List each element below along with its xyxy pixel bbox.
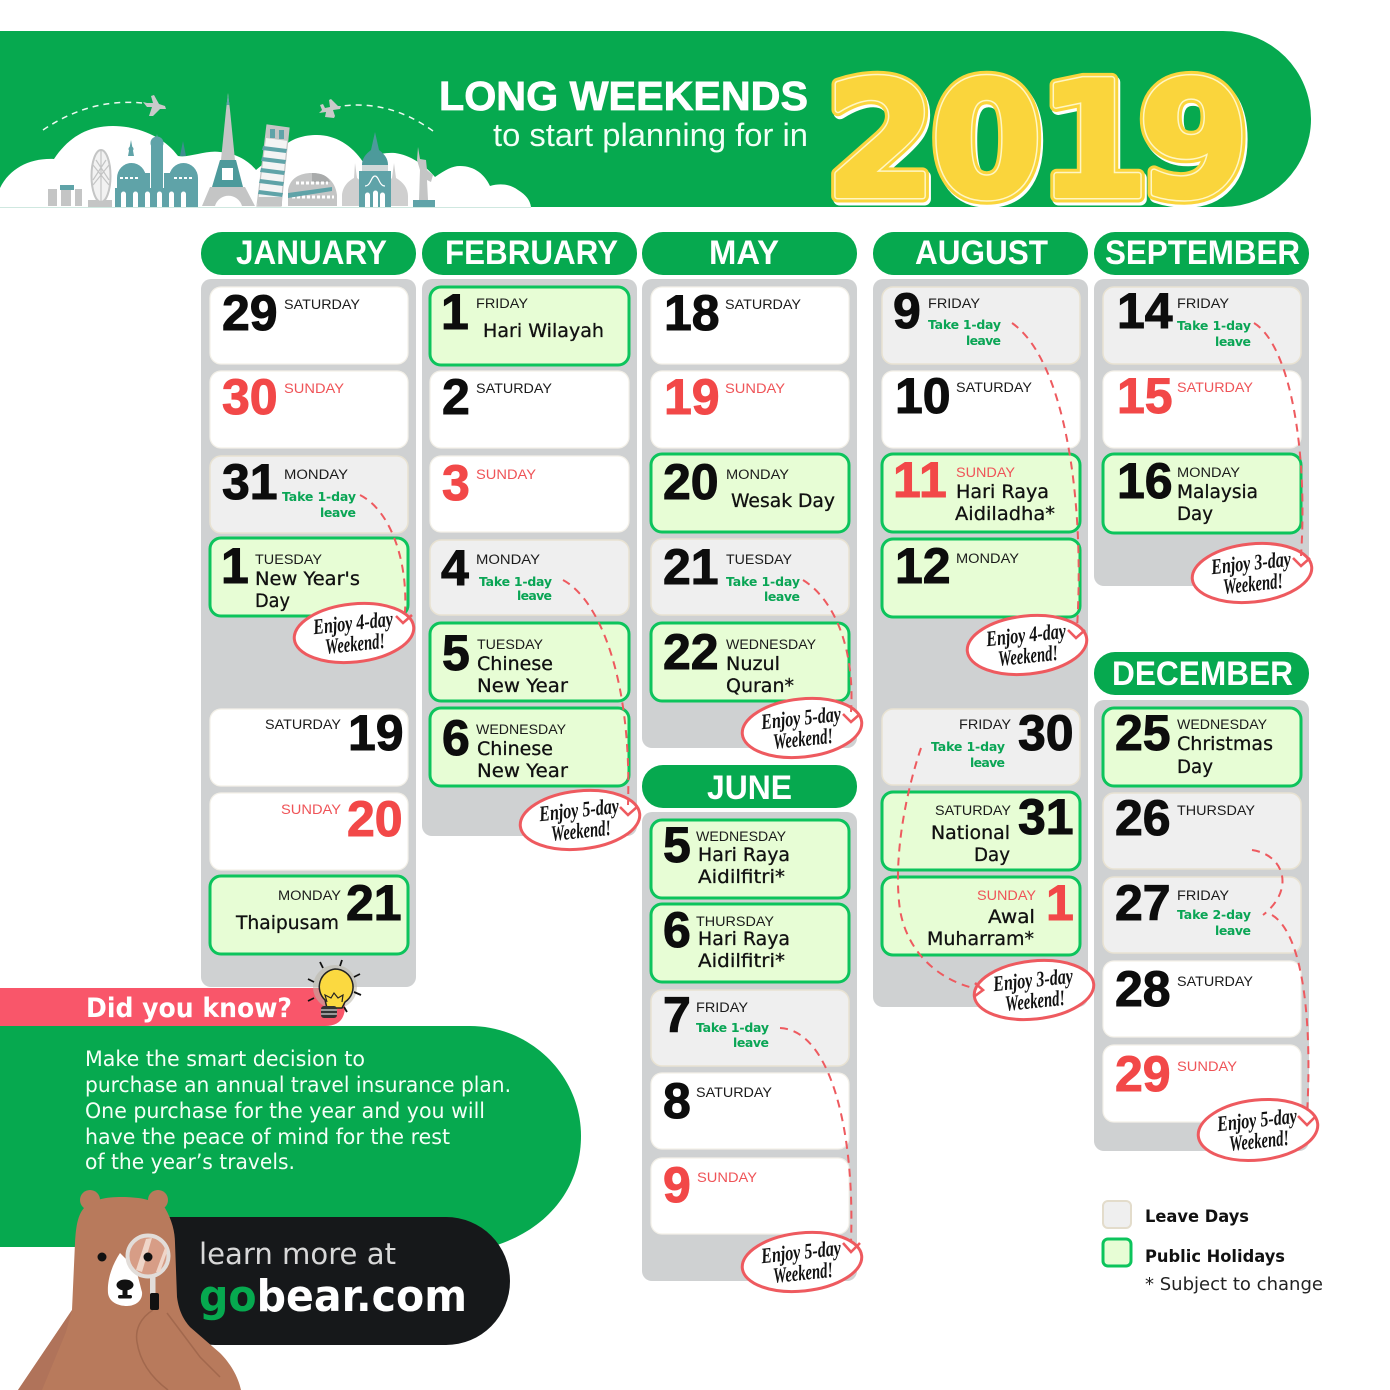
card: 16 malaysia day [1103,453,1301,533]
card: 7 friday: FRIDAY [696,1000,748,1015]
card: 7 friday: Take 1-day [696,1020,769,1035]
card: 30 sunday: SUNDAY [284,381,344,396]
arrow: june [780,1028,860,1252]
card: 3 sunday: SUNDAY [476,467,536,482]
callout: enjoy 5-day weekend february: Weekend! [550,815,612,846]
legend: public holidays [1103,1239,1285,1267]
card: 1 awal muharram: 1 [1046,875,1074,931]
card: 11 hari raya aidiladha [882,452,1080,532]
card: 20 sunday: SUNDAY [281,802,341,817]
card: 1 awal muharram: SUNDAY [977,888,1036,903]
panel: august [873,232,1088,1007]
card: 22 nuzul quran: WEDNESDAY [726,637,816,652]
card: 16 malaysia day: 16 [1117,453,1173,509]
card: 19 sunday: 19 [664,369,720,425]
card: 11 hari raya aidiladha: Hari Raya [956,481,1049,503]
card: 19 saturday: 19 [348,705,404,761]
card: 9 friday: Take 1-day [928,317,1001,332]
callout: enjoy 5-day weekend may [739,693,865,763]
callout: enjoy 4-day weekend january: Weekend! [324,628,386,659]
panel: september [1094,232,1309,586]
card: 27 friday: 27 [1115,875,1171,931]
card: 25 christmas day [1103,705,1301,786]
card: 9 sunday: 9 [663,1157,691,1213]
card: 9 friday [882,283,1080,364]
panel: may [642,232,857,748]
card: 25 christmas day: WEDNESDAY [1177,717,1267,732]
card: 6 chinese new year: Chinese [477,738,553,760]
card: 1 awal muharram: Muharram* [927,928,1034,950]
card: 14 friday: Take 1-day [1177,318,1251,333]
card: 14 friday: FRIDAY [1177,296,1229,311]
card: 12 monday: MONDAY [956,551,1019,566]
card: 29 sunday: 29 [1115,1046,1171,1102]
arrow: february [563,580,637,815]
header banner [0,31,1311,237]
card: 6 chinese new year: 6 [442,710,470,766]
card: 22 nuzul quran: Quran* [726,675,794,697]
body text: purchase an annual travel insurance plan. [85,1073,511,1097]
card: 14 friday: 14 [1117,283,1173,339]
card: 5 chinese new year: 5 [442,625,470,681]
panel: december [1094,652,1309,1151]
card: 10 saturday [882,368,1080,448]
panel: learn more: learn more at [199,1237,396,1271]
card: 11 hari raya aidiladha: Aidiladha* [955,503,1055,525]
arrow: december [1252,850,1316,1125]
year 2019: 2019 [825,47,1249,234]
card: 4 monday: MONDAY [476,552,540,567]
year 2019: 2019 [827,50,1251,237]
year 2019: 2019 [825,47,1249,234]
card: 30 friday: FRIDAY [959,717,1011,732]
card: 1 new year's day: New Year's [255,568,360,590]
card: 31 monday: MONDAY [284,467,348,482]
legend: leave days: Leave Days [1145,1207,1249,1227]
card: 25 christmas day: Christmas [1177,733,1273,755]
callout: enjoy 5-day weekend february: Enjoy 5-day [537,793,620,826]
plane and flight paths [43,95,433,131]
card: 21 tuesday: TUESDAY [726,552,792,567]
card: 3 sunday [430,455,629,532]
card: 19 sunday: SUNDAY [725,381,785,396]
callout: enjoy 4-day weekend august: Weekend! [997,640,1059,671]
card: 3 sunday: 3 [442,455,470,511]
card: 31 monday: leave [320,505,356,520]
card: 5 hari raya aidilfitri [651,817,849,898]
legend: leave days [1103,1201,1249,1228]
card: 4 monday [430,540,629,615]
year 2019: 2019 [825,47,1249,234]
card: 28 saturday: SATURDAY [1177,974,1253,989]
card: 29 sunday [1103,1045,1301,1122]
callout: enjoy 4-day weekend august [964,610,1090,680]
arrow: may [803,580,860,722]
card: 15 saturday [1103,368,1301,448]
panel: learn more: gobear.com [199,1271,467,1322]
card: 22 nuzul quran [651,623,849,701]
legend [1103,1201,1323,1295]
card: 1 awal muharram [882,875,1080,955]
card: 9 friday: FRIDAY [928,296,980,311]
title: LONG WEEKENDS [439,73,808,119]
card: 2 saturday: SATURDAY [476,381,552,396]
card: 5 chinese new year [430,623,629,701]
card: 1 hari wilayah: Hari Wilayah [483,320,604,342]
card: 4 monday: Take 1-day [479,574,552,589]
card: 2 saturday [430,369,629,448]
card: 16 malaysia day: Day [1177,503,1213,525]
card: 31 monday [210,454,408,533]
card: 27 friday: leave [1215,923,1251,938]
card: 31 national day: National [931,822,1010,844]
card: 19 saturday: SATURDAY [265,717,341,732]
card: 6 chinese new year: New Year [477,760,568,782]
callout: enjoy 5-day weekend may: Enjoy 5-day [759,701,842,734]
card: 21 tuesday: 21 [663,539,719,595]
card: 26 thursday [1103,790,1301,869]
card: 18 saturday: 18 [664,285,720,341]
title [439,73,808,153]
card: 6 chinese new year [430,708,629,786]
card: 1 hari wilayah: FRIDAY [476,296,528,311]
card: 5 chinese new year: New Year [477,675,568,697]
callout: enjoy 3-day weekend august: Enjoy 3-day [991,963,1074,996]
arrow: august long weekend [1012,323,1085,638]
callout: enjoy 5-day weekend december: Enjoy 5-day [1215,1103,1298,1136]
card: 6 hari raya aidilfitri [651,902,849,982]
card: 31 monday: 31 [222,454,278,510]
panel: june [642,765,857,1281]
panel: february [422,232,637,836]
callout: enjoy 5-day weekend may: Weekend! [772,723,834,754]
card: 20 wesak day: MONDAY [726,467,789,482]
panel: did you know [0,960,581,1247]
card: 1 new year's day: 1 [221,538,249,594]
card: 1 new year's day: Day [255,590,290,612]
card: 8 saturday: 8 [663,1073,691,1129]
card: 20 sunday [210,791,408,870]
card: 15 saturday: 15 [1117,368,1173,424]
card: 6 hari raya aidilfitri: 6 [663,902,691,958]
body text: One purchase for the year and you will [85,1099,485,1123]
card: 21 thaipusam: 21 [346,875,402,931]
card: 20 sunday: 20 [347,791,403,847]
card: 20 wesak day: 20 [663,454,719,510]
card: 31 national day: 31 [1018,789,1074,845]
callout: enjoy 5-day weekend june: Enjoy 5-day [759,1235,842,1268]
card: 8 saturday [651,1073,849,1149]
body text: Make the smart decision to [85,1047,365,1071]
callout: enjoy 5-day weekend february [517,785,643,855]
card: 5 chinese new year: Chinese [477,653,553,675]
card: 5 hari raya aidilfitri: Hari Raya [698,844,790,866]
heading: Did you know? [86,993,292,1024]
panel: january: JANUARY [236,234,387,272]
card: 11 hari raya aidiladha: 11 [893,452,948,508]
card: 11 hari raya aidiladha: SUNDAY [956,465,1015,480]
card: 2 saturday: 2 [442,369,470,425]
body text [85,1047,511,1174]
card: 6 hari raya aidilfitri: Aidilfitri* [698,950,785,972]
card: 18 saturday [651,285,849,364]
card: 6 hari raya aidilfitri: Hari Raya [698,928,790,950]
card: 21 tuesday: leave [764,589,800,604]
card: 21 tuesday [651,539,849,615]
panel: september: SEPTEMBER [1105,234,1300,272]
panel: may: MAY [709,234,779,272]
card: 26 thursday: THURSDAY [1177,803,1255,818]
arrow: august end [898,748,983,996]
card: 22 nuzul quran: 22 [663,624,719,680]
card: 10 saturday: SATURDAY [956,380,1032,395]
card: 26 thursday: 26 [1115,790,1171,846]
callout: enjoy 5-day weekend june: Weekend! [772,1257,834,1288]
card: 30 friday: leave [970,755,1005,770]
callout: enjoy 3-day weekend august: Weekend! [1004,985,1066,1016]
arrow: january [360,495,412,623]
card: 1 hari wilayah [430,284,629,365]
card: 19 sunday [651,369,849,448]
callout: enjoy 5-day weekend december: Weekend! [1228,1125,1290,1156]
icon: light bulb [308,960,361,1018]
callout: enjoy 4-day weekend august: Enjoy 4-day [984,618,1067,651]
body text: of the year’s travels. [85,1150,295,1174]
panel: june: JUNE [707,769,792,807]
card: 9 friday: 9 [893,283,921,339]
card: 1 hari wilayah: 1 [441,284,469,340]
title: to start planning for in [493,117,808,153]
card: 1 new year's day [210,538,408,616]
card: 21 thaipusam: MONDAY [278,888,341,903]
card: 5 hari raya aidilfitri: Aidilfitri* [698,866,785,888]
card: 14 friday [1103,283,1301,364]
card: 30 friday: 30 [1018,705,1074,761]
card: 8 saturday: SATURDAY [696,1085,772,1100]
card: 7 friday: leave [733,1035,769,1050]
card: 29 saturday: 29 [222,285,278,341]
card: 7 friday [651,987,849,1066]
card: 30 friday [882,705,1080,785]
card: 30 friday: Take 1-day [931,739,1005,754]
card: 31 national day: Day [974,844,1010,866]
card: 30 sunday [210,369,408,448]
card: 12 monday: 12 [895,538,951,594]
card: 5 hari raya aidilfitri: WEDNESDAY [696,829,786,844]
arrow: september [1254,323,1310,566]
card: 20 wesak day [651,454,849,532]
panel: december: DECEMBER [1112,655,1293,693]
card: 31 national day [882,789,1080,870]
card: 28 saturday: 28 [1115,961,1171,1017]
callout: enjoy 4-day weekend january: Enjoy 4-day [311,606,394,639]
card: 9 sunday: SUNDAY [697,1170,757,1185]
card: 14 friday: leave [1215,334,1251,349]
card: 12 monday [882,538,1080,617]
panel: february: FEBRUARY [445,234,618,272]
card: 31 national day: SATURDAY [935,803,1011,818]
card: 4 monday: leave [517,588,552,603]
callout: enjoy 3-day weekend september: Enjoy 3-day [1209,546,1292,579]
callout: enjoy 5-day weekend december [1195,1094,1321,1166]
card: 31 monday: Take 1-day [282,489,356,504]
footnote: * Subject to change [1145,1275,1323,1295]
card: 19 saturday [210,705,408,786]
panel: august: AUGUST [915,234,1048,272]
card: 1 new year's day: TUESDAY [255,552,322,567]
card: 27 friday [1103,875,1301,953]
card: 1 awal muharram: Awal [988,906,1035,928]
card: 20 wesak day: Wesak Day [731,490,835,512]
skyline illustration [0,93,531,208]
callout: enjoy 4-day weekend january [291,598,417,668]
card: 29 saturday [210,285,408,364]
card: 25 christmas day: Day [1177,756,1213,778]
card: 5 hari raya aidilfitri: 5 [663,817,691,873]
card: 16 malaysia day: Malaysia [1177,481,1258,503]
icon: bear with magnifying glass [18,1190,241,1390]
card: 18 saturday: SATURDAY [725,297,801,312]
callout: enjoy 5-day weekend june [739,1227,865,1297]
card: 5 chinese new year: TUESDAY [477,637,543,652]
card: 29 saturday: SATURDAY [284,297,360,312]
card: 4 monday: 4 [441,540,469,596]
callout: enjoy 3-day weekend august [971,955,1097,1025]
card: 16 malaysia day: MONDAY [1177,465,1240,480]
card: 15 saturday: SATURDAY [1177,380,1253,395]
card: 21 thaipusam: Thaipusam [235,912,339,934]
card: 7 friday: 7 [663,987,691,1043]
card: 27 friday: Take 2-day [1177,907,1251,922]
callout: enjoy 3-day weekend september: Weekend! [1222,568,1284,599]
body text: have the peace of mind for the rest [85,1125,450,1149]
card: 9 sunday [651,1157,849,1234]
card: 6 chinese new year: WEDNESDAY [476,722,566,737]
legend: public holidays: Public Holidays [1145,1247,1285,1267]
card: 28 saturday [1103,961,1301,1037]
panel: january [201,232,416,987]
card: 10 saturday: 10 [895,368,951,424]
card: 29 sunday: SUNDAY [1177,1059,1237,1074]
card: 30 sunday: 30 [222,369,278,425]
card: 25 christmas day: 25 [1115,705,1171,761]
card: 21 thaipusam [210,875,408,954]
card: 21 tuesday: Take 1-day [726,574,800,589]
callout: enjoy 3-day weekend september [1189,538,1315,608]
card: 22 nuzul quran: Nuzul [726,653,780,675]
card: 6 hari raya aidilfitri: THURSDAY [696,914,774,929]
card: 9 friday: leave [966,333,1001,348]
panel: learn more [160,1217,510,1345]
card: 27 friday: FRIDAY [1177,888,1229,903]
